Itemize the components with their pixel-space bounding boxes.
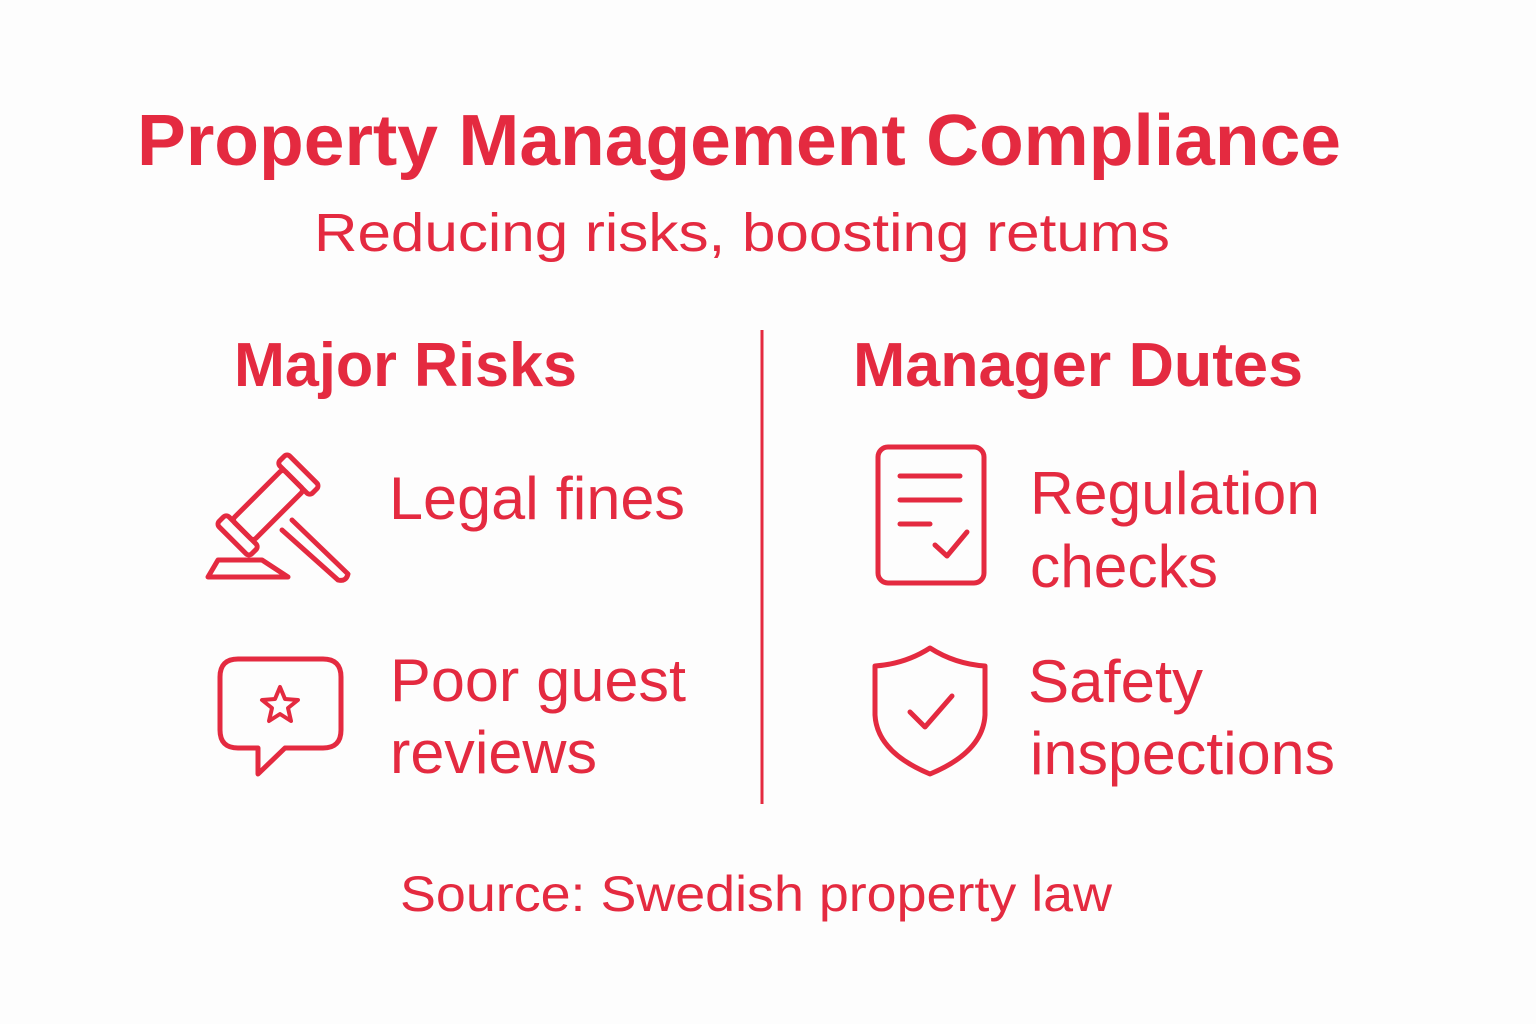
text: Regulation checks: checks [1030,533,1218,600]
icon: speech bubble with star [220,659,341,774]
icon: checklist [878,447,984,583]
text: Poor guest reviews [390,647,686,786]
text: Regulation checks [1030,460,1320,600]
text: Safety inspections [1028,648,1335,787]
text: Regulation checks: Regulation [1030,460,1320,527]
heading: Major Risks: Major Risks [234,331,577,400]
text: Legal fines: Legal fines [389,465,685,532]
text: Poor guest reviews: Poor guest [390,647,686,714]
icon: gavel [208,453,348,580]
divider [760,330,764,804]
source: Source: Swedish property law [400,866,1113,922]
icon: shield [875,648,985,774]
text: Safety inspections: Safety [1028,648,1203,715]
heading: Manager Dutes: Manager Dutes [853,331,1303,400]
text: Safety inspections: inspections [1030,720,1335,787]
text: Poor guest reviews: reviews [390,719,597,786]
title: Property Management Compliance [137,101,1341,181]
subtitle: Reducing risks, boosting retums [314,203,1170,263]
